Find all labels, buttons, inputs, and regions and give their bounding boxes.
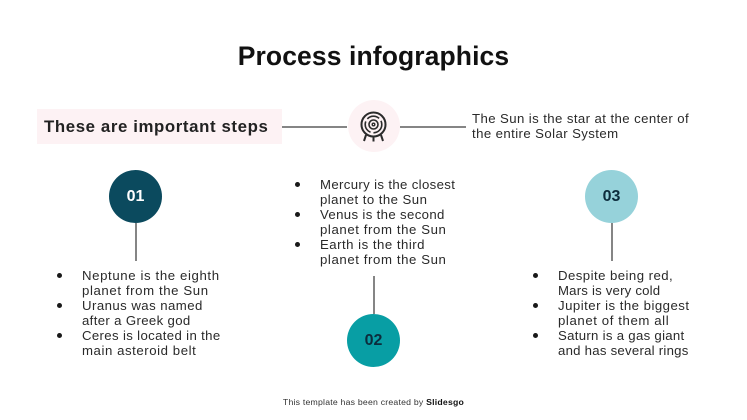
step 01 list: after a Greek god — [82, 313, 191, 328]
step 01 list: main asteroid belt — [82, 343, 196, 358]
step 03 list: Despite being red, — [558, 268, 673, 283]
icon: target on tripod — [348, 100, 400, 152]
step 02 list: planet from the Sun — [320, 252, 446, 267]
step 02 list: planet from the Sun — [320, 222, 446, 237]
step 01 list — [57, 268, 221, 358]
text: sun description — [472, 111, 689, 141]
step 02 connector — [373, 276, 374, 314]
step 01 circle: 01 — [127, 188, 144, 205]
step 03 list: Saturn is a gas giant — [558, 328, 685, 343]
connector right — [400, 126, 466, 128]
step 03 list: Jupiter is the biggest — [558, 298, 690, 313]
step 02 list: Earth is the third — [320, 237, 425, 252]
step 03 circle — [585, 170, 638, 223]
step 03 — [533, 170, 690, 358]
heading band: these are important steps: These are important steps — [44, 117, 268, 136]
step 01 list: planet from the Sun — [82, 283, 209, 298]
step 02 — [295, 177, 455, 367]
text: sun description: The Sun is the star at the center of — [472, 111, 689, 126]
step 03 list — [533, 268, 690, 358]
step 01 connector — [135, 223, 136, 261]
step 02 list: planet to the Sun — [320, 192, 427, 207]
step 01 — [57, 170, 221, 358]
step 01 list: Ceres is located in the — [82, 328, 221, 343]
heading band: these are important steps — [37, 109, 282, 144]
footer credit: This template has been created by Slidesgo — [283, 397, 464, 407]
step 02 list — [295, 177, 455, 267]
step 02 circle — [347, 314, 400, 367]
step 03 list: and has several rings — [558, 343, 689, 358]
connector left — [282, 126, 347, 128]
step 02 circle: 02 — [365, 332, 382, 349]
step 03 list: Mars is very cold — [558, 283, 660, 298]
text: sun description: the entire Solar System — [472, 126, 618, 141]
step 01 circle — [109, 170, 162, 223]
step 01 list: Neptune is the eighth — [82, 268, 220, 283]
step 03 circle: 03 — [603, 188, 620, 205]
step 02 list: Venus is the second — [320, 207, 445, 222]
title: Process infographics — [238, 41, 509, 71]
step 01 list: Uranus was named — [82, 298, 203, 313]
step 03 list: planet of them all — [558, 313, 669, 328]
step 03 connector — [611, 223, 612, 261]
step 02 list: Mercury is the closest — [320, 177, 455, 192]
